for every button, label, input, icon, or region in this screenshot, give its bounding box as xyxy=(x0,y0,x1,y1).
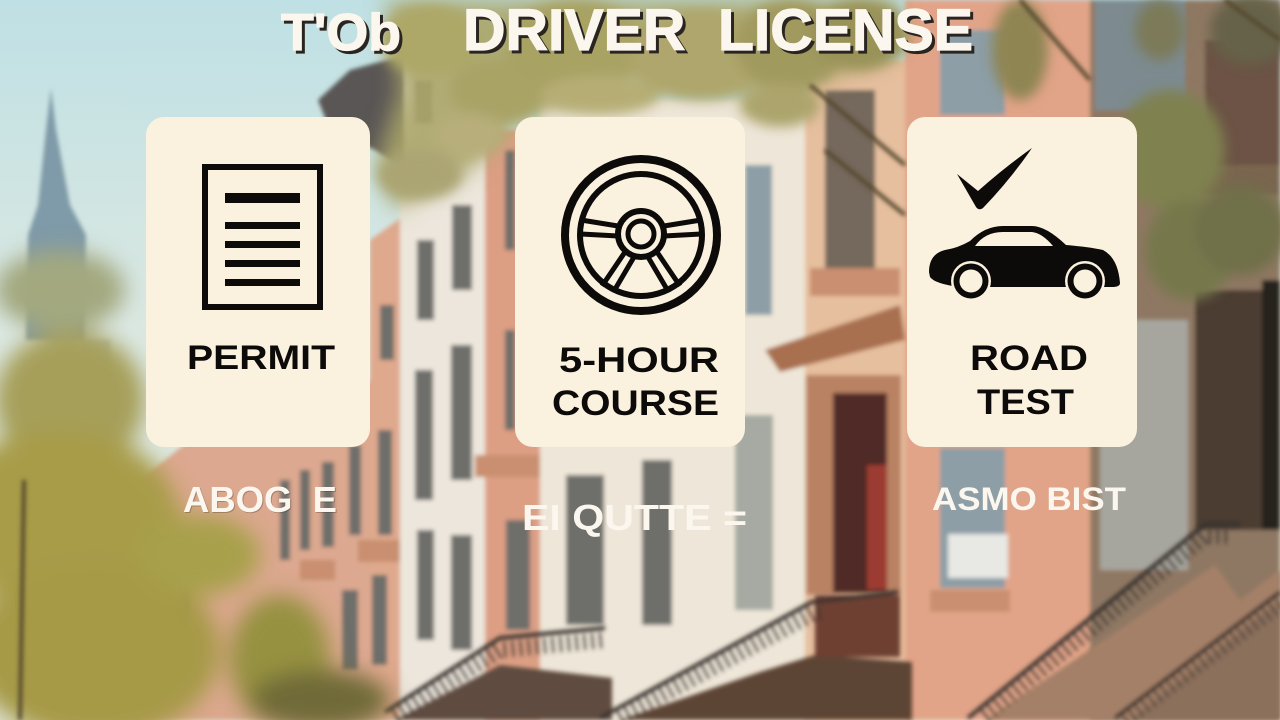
icon: steering wheel xyxy=(565,159,717,311)
label: 5-hour course: 5-HOUR xyxy=(559,341,719,380)
dark building right xyxy=(1195,290,1280,530)
panel: 5-hour course xyxy=(515,117,745,447)
balusters xyxy=(395,536,1280,720)
front door xyxy=(806,375,901,595)
icon: document xyxy=(205,167,320,307)
caption: right: ASMO BIST xyxy=(932,481,1126,517)
panel: permit xyxy=(146,117,370,447)
tree canopy xyxy=(0,0,900,720)
door pediment xyxy=(765,305,905,372)
label: road test: TEST xyxy=(977,383,1074,422)
caption: middle: EI QUTTE = xyxy=(522,497,747,538)
windows xyxy=(140,80,672,670)
label: road test xyxy=(970,339,1088,422)
caption: left: ABOG E xyxy=(183,479,337,520)
title: DRIVER LICENSE xyxy=(466,1,976,66)
icon: check mark xyxy=(957,148,1032,209)
air conditioner xyxy=(948,534,1008,578)
label: road test: ROAD xyxy=(970,339,1088,378)
label: 5-hour course: COURSE xyxy=(552,384,719,423)
stoops and railings xyxy=(385,524,1280,720)
caption: left: ABOG E xyxy=(184,480,338,521)
label: 5-hour course xyxy=(552,341,719,423)
ledges xyxy=(300,268,1010,612)
panel: road test xyxy=(907,117,1137,447)
title: T'Ob xyxy=(281,4,401,62)
church spire xyxy=(26,88,110,430)
title: T'Ob xyxy=(284,7,404,65)
label: permit: PERMIT xyxy=(187,339,335,377)
icon: car xyxy=(929,226,1120,301)
